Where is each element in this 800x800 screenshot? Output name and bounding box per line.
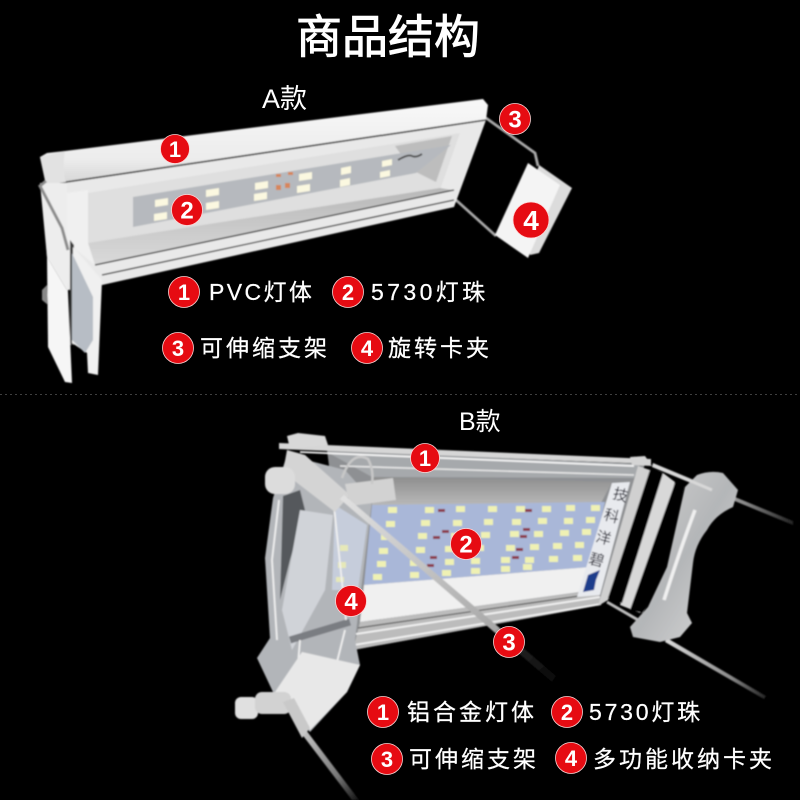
PVC lamp body: 1 — [178, 280, 190, 305]
red LEDs — [427, 509, 532, 567]
badge 3: 3 — [502, 630, 516, 656]
telescopic bracket: 3 — [381, 747, 393, 772]
multifunction storage clip: 多功能收纳卡夹 — [593, 746, 775, 772]
badge 3 — [500, 104, 530, 134]
badge 4 — [513, 202, 549, 238]
badge 2 — [172, 194, 202, 226]
callouts on lamp B — [336, 444, 524, 658]
rotating clip, right — [495, 163, 572, 258]
right telescopic rods — [607, 463, 793, 699]
bottom mount — [275, 652, 360, 730]
brand label text: 洋 — [594, 528, 613, 549]
brand label text: 科 — [602, 506, 621, 527]
badge 3: 3 — [508, 106, 522, 134]
legend: model A — [162, 276, 492, 364]
LED beads — [154, 159, 392, 221]
brand label text — [587, 485, 630, 571]
aluminium lamp body — [368, 696, 537, 728]
top rail with rod — [279, 443, 651, 464]
badge 2 — [450, 528, 482, 560]
lower aluminium rails — [353, 590, 601, 650]
badge 1: 1 — [419, 446, 431, 471]
brand label text: 碧 — [587, 550, 606, 571]
bar underside line — [46, 120, 486, 185]
bottom knob — [235, 697, 258, 719]
5730 beads: 5730灯珠 — [589, 699, 703, 725]
badge 2: 2 — [180, 198, 194, 224]
top right knob — [345, 478, 396, 506]
section divider — [0, 394, 800, 396]
right rod overlay — [653, 465, 712, 490]
top left knob — [265, 467, 295, 494]
rotating clip: 4 — [361, 336, 374, 361]
LEDs — [373, 505, 600, 580]
heading: model B: B款 — [459, 408, 501, 436]
LED strip — [133, 145, 451, 227]
top junction — [283, 450, 350, 512]
black slots — [608, 470, 663, 603]
side wall — [40, 183, 70, 292]
panel dark slit — [280, 490, 305, 600]
top left cap — [287, 433, 328, 449]
brand logo mark — [583, 570, 600, 592]
5730 beads — [332, 276, 489, 308]
5730 beads: 2 — [561, 700, 573, 725]
panel side strip — [332, 505, 367, 590]
badge 4: 4 — [344, 588, 358, 616]
multifunction storage clip — [556, 742, 775, 774]
panel LEDs — [336, 545, 348, 582]
badge 1 — [410, 444, 440, 472]
rail groove lines — [95, 190, 454, 275]
grey panel — [372, 477, 612, 505]
window recess — [88, 133, 460, 243]
5730 beads: 2 — [342, 280, 354, 305]
product photo: lamp A — [40, 99, 572, 383]
telescopic bracket: 3 — [172, 336, 184, 361]
telescopic wire bracket, right — [456, 118, 538, 236]
top cylinder bar — [40, 99, 488, 185]
PVC lamp body: PVC灯体 — [209, 279, 314, 305]
badge 2: 2 — [459, 532, 473, 558]
telescopic bracket: 可伸缩支架 — [200, 335, 330, 361]
small bottom wedge — [283, 698, 310, 738]
power wire — [398, 154, 422, 160]
badge 3 — [494, 626, 524, 658]
frame right edge — [598, 466, 650, 606]
bar end cap — [40, 151, 66, 185]
white lower reflector — [360, 567, 590, 622]
brand label text: 技 — [611, 485, 630, 506]
legend: model B — [368, 696, 775, 774]
badge 1: 1 — [169, 137, 181, 162]
top right cap — [630, 456, 652, 466]
telescopic bracket — [162, 332, 330, 364]
lamp body — [327, 450, 645, 650]
acrylic hook — [342, 457, 372, 484]
wire bracket, left — [40, 181, 68, 250]
rotating clip: 旋转卡夹 — [388, 335, 492, 361]
lamp body — [42, 120, 486, 290]
clip body, left — [42, 240, 102, 383]
panel lower stripes — [290, 622, 350, 640]
left acrylic panel — [257, 455, 372, 732]
right acrylic clip — [630, 472, 738, 642]
badge 1 — [160, 134, 190, 164]
badge 4: 4 — [523, 205, 539, 236]
bottom left rod — [301, 730, 359, 800]
badge 4 — [336, 586, 366, 616]
panel rim lines — [272, 497, 346, 700]
lower reflector — [88, 188, 452, 265]
multifunction storage clip: 4 — [565, 746, 578, 771]
PVC lamp body — [168, 276, 314, 308]
telescopic bracket: 可伸缩支架 — [409, 746, 539, 772]
brand label — [577, 482, 630, 597]
callouts on lamp A — [160, 104, 549, 238]
main telescopic rod — [340, 495, 556, 682]
telescopic bracket — [372, 744, 539, 774]
heading: model A: A款 — [262, 84, 307, 114]
red LED beads — [276, 172, 293, 190]
side post — [67, 190, 95, 265]
product photo: lamp B — [235, 433, 793, 800]
upper glass rail — [327, 452, 640, 478]
5730 beads: 5730灯珠 — [371, 279, 489, 305]
5730 beads — [552, 696, 703, 728]
right acrylic band — [620, 473, 675, 613]
window end reflector — [395, 136, 452, 182]
rotating clip — [352, 332, 492, 364]
aluminium lamp body: 1 — [377, 700, 389, 725]
panel centre — [282, 510, 333, 650]
blue LED board — [364, 502, 605, 585]
aluminium lamp body: 铝合金灯体 — [407, 699, 537, 725]
title: 商品结构 — [296, 11, 480, 63]
